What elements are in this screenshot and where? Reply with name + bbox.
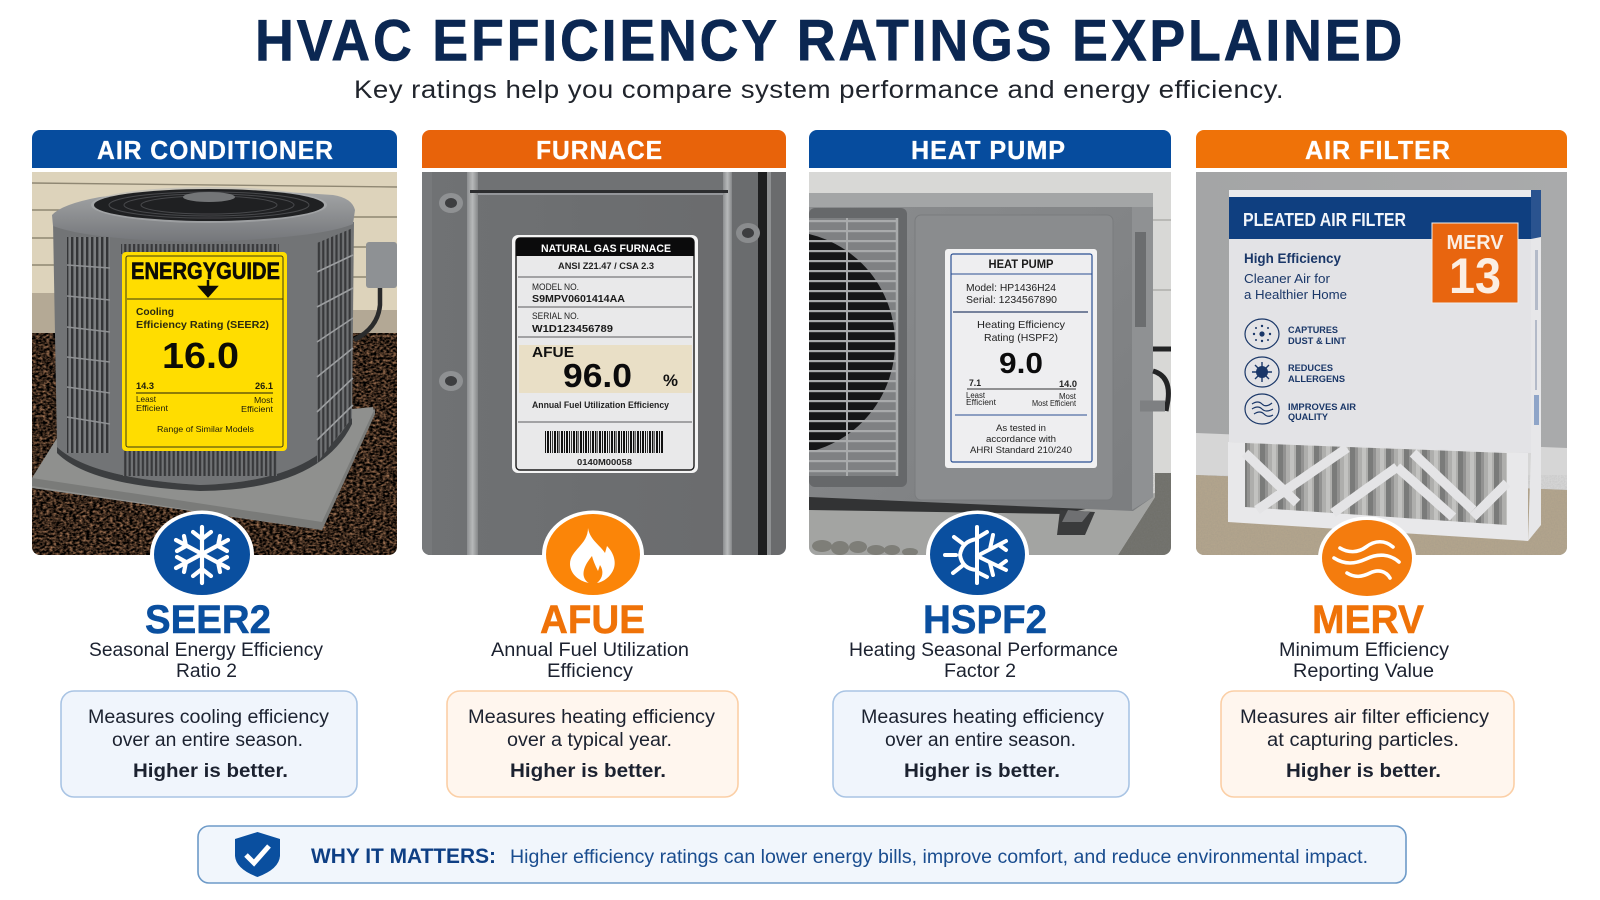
- callout: SEER2: [61, 691, 357, 797]
- label: energyguide: Efficiency Rating (SEER2): [136, 319, 269, 331]
- feature: reduces allergens: [1245, 357, 1345, 387]
- condenser body: [53, 222, 354, 485]
- rating plate: 96.0: [563, 357, 632, 394]
- rating description: MERV: [1279, 640, 1450, 682]
- label: energyguide: [122, 252, 287, 451]
- why it matters text: Higher efficiency ratings can lower energy bills, improve comfort, and reduce environmental impact.: [510, 847, 1368, 868]
- panel: air conditioner: [32, 130, 397, 797]
- heat pump label: Most: [1059, 392, 1077, 401]
- icon: sun and snowflake: [926, 510, 1029, 598]
- subtitle: Key ratings help you compare system performance and energy efficiency.: [354, 76, 1284, 104]
- unit: [809, 193, 1153, 511]
- feature: captures dust: CAPTURES: [1288, 325, 1338, 335]
- label: energyguide: Efficient: [136, 403, 169, 413]
- rating description: AFUE: Efficiency: [547, 661, 634, 682]
- feature: captures dust: [1245, 319, 1347, 349]
- screws: [439, 193, 760, 391]
- rating plate: SERIAL NO.: [532, 311, 579, 321]
- rating description: SEER2: [89, 640, 324, 682]
- callout: AFUE: Measures heating efficiency: [468, 707, 716, 728]
- rating description: AFUE: Annual Fuel Utilization: [491, 640, 689, 661]
- callout: MERV: Higher is better.: [1286, 761, 1441, 782]
- rating plate: AFUE: [532, 344, 574, 361]
- panel: air filter: [1196, 130, 1567, 797]
- label: energyguide: Efficient: [241, 404, 274, 414]
- rating description: SEER2: Seasonal Energy Efficiency: [89, 640, 324, 661]
- panel: heat pump: [809, 130, 1171, 798]
- pipes: [1153, 349, 1171, 411]
- callout: MERV: at capturing particles.: [1267, 730, 1459, 751]
- icon: snowflake: [150, 510, 254, 598]
- feature: reduces allergens: REDUCES: [1288, 363, 1333, 373]
- header: furnace: [422, 130, 786, 168]
- rating description: MERV: Minimum Efficiency: [1279, 640, 1450, 661]
- photo: pleated air filter box: High Efficiency: [1244, 250, 1341, 266]
- rating name: HSPF2: HSPF2: [923, 598, 1047, 642]
- pad: [32, 407, 375, 530]
- callout: MERV: [1221, 691, 1514, 797]
- callout: why it matters: [198, 826, 1406, 883]
- rating plate: S9MPV0601414AA: [532, 293, 625, 305]
- rating name: MERV: MERV: [1312, 598, 1424, 642]
- photo: pleated air filter box: PLEATED AIR FILTER: [1243, 210, 1406, 230]
- heat pump label: Least: [966, 391, 986, 400]
- icon: shield with check: [235, 832, 280, 877]
- header: heat pump: HEAT PUMP: [911, 135, 1066, 165]
- photo: pleated air filter box: [1196, 172, 1567, 555]
- callout: AFUE: [447, 691, 738, 797]
- callout: MERV: Measures air filter efficiency: [1240, 707, 1490, 728]
- label: energyguide: Range of Similar Models: [157, 424, 254, 434]
- rating plate: %: [663, 371, 678, 390]
- heat pump label: Heating Efficiency: [977, 320, 1066, 331]
- rating description: AFUE: [491, 640, 689, 682]
- photo: pleated air filter box: Cleaner Air for: [1244, 271, 1331, 286]
- box side: [1528, 237, 1541, 541]
- feature: improves air quality: [1245, 394, 1357, 424]
- rating description: SEER2: Ratio 2: [176, 661, 237, 682]
- rating description: HSPF2: Factor 2: [944, 661, 1016, 682]
- stones: [812, 540, 918, 556]
- callout: AFUE: over a typical year.: [507, 730, 672, 751]
- MERV badge: 13: [1449, 248, 1501, 304]
- MERV badge: [1432, 223, 1518, 304]
- rating plate: W1D123456789: [532, 323, 613, 335]
- heat pump label: HEAT PUMP: [988, 259, 1054, 271]
- foot: [1057, 510, 1095, 535]
- rating description: HSPF2: [849, 640, 1118, 682]
- icon: flame: [542, 510, 644, 598]
- feature: improves air quality: QUALITY: [1288, 412, 1328, 422]
- photo: outdoor AC unit with EnergyGuide label: [32, 172, 397, 555]
- callout: SEER2: Measures cooling efficiency: [88, 707, 330, 728]
- why it matters text: WHY IT MATTERS:: [311, 845, 496, 868]
- title: HVAC EFFICIENCY RATINGS EXPLAINED: [255, 8, 1405, 74]
- callout: SEER2: Higher is better.: [133, 761, 288, 782]
- heat pump label: AHRI Standard 210/240: [970, 445, 1072, 455]
- panel: [915, 215, 1113, 500]
- rating plate: 0140M00058: [577, 457, 632, 467]
- callout: HSPF2: over an entire season.: [885, 730, 1076, 751]
- MERV badge: MERV: [1446, 232, 1504, 254]
- callout: AFUE: Higher is better.: [510, 761, 666, 782]
- rating plate: Annual Fuel Utilization Efficiency: [532, 400, 669, 410]
- heat pump label: accordance with: [986, 434, 1056, 444]
- heat pump label: 9.0: [999, 348, 1043, 380]
- rating name: AFUE: AFUE: [540, 598, 645, 642]
- label: energyguide: Least: [136, 394, 157, 404]
- callout: HSPF2: Higher is better.: [904, 761, 1060, 782]
- rating description: MERV: Reporting Value: [1293, 661, 1434, 682]
- label: energyguide: Cooling: [136, 306, 174, 318]
- photo: furnace cabinet with rating plate: [422, 172, 786, 555]
- photo: pleated air filter box: a Healthier Home: [1244, 287, 1347, 302]
- heat pump label: 7.1: [969, 378, 981, 388]
- rating description: HSPF2: Heating Seasonal Performance: [849, 640, 1118, 661]
- heat pump label: Rating (HSPF2): [984, 333, 1058, 344]
- callout: SEER2: over an entire season.: [112, 730, 303, 751]
- rating plate: MODEL NO.: [532, 282, 579, 292]
- feature: reduces allergens: ALLERGENS: [1288, 374, 1345, 384]
- heat pump label: Efficient: [966, 398, 997, 407]
- callout: HSPF2: [833, 691, 1129, 797]
- callout: HSPF2: Measures heating efficiency: [861, 707, 1105, 728]
- gravel right: [1118, 473, 1171, 555]
- fan: [91, 187, 327, 223]
- photo: heat pump unit with label: [809, 172, 1171, 555]
- fan guard: [809, 208, 907, 487]
- box front: [1229, 190, 1531, 197]
- rating plate: NATURAL GAS FURNACE: [541, 243, 671, 255]
- header: air conditioner: [32, 130, 397, 168]
- header: air filter: AIR FILTER: [1305, 135, 1451, 165]
- feature: captures dust: DUST & LINT: [1288, 336, 1347, 346]
- pad: [809, 493, 1155, 555]
- filter frame: [1228, 442, 1528, 541]
- rating name: SEER2: SEER2: [145, 598, 271, 642]
- rating plate: ANSI Z21.47 / CSA 2.3: [558, 261, 654, 272]
- label: energyguide: 16.0: [162, 335, 239, 376]
- heat pump label: As tested in: [996, 423, 1046, 433]
- feature: improves air quality: IMPROVES AIR: [1288, 402, 1357, 412]
- label: energyguide: 14.3: [136, 381, 154, 392]
- label: energyguide: Most: [254, 395, 274, 405]
- heat pump label: 14.0: [1059, 379, 1077, 389]
- heat pump label: [945, 249, 1097, 468]
- header: air conditioner: AIR CONDITIONER: [97, 135, 334, 165]
- heat pump label: Model: HP1436H24: [966, 283, 1056, 294]
- label: energyguide: ENERGYGUIDE: [131, 258, 280, 285]
- disconnect box: [366, 242, 397, 288]
- header: furnace: FURNACE: [536, 135, 663, 165]
- icon: air waves: [1318, 516, 1416, 600]
- header: air filter: [1196, 130, 1567, 168]
- rating plate: [512, 235, 698, 473]
- shadow under unit: [809, 497, 1086, 514]
- panel: furnace: [422, 130, 786, 797]
- header: heat pump: [809, 130, 1171, 168]
- heat pump label: Most Efficient: [1032, 399, 1077, 408]
- heat pump label: Serial: 1234567890: [966, 295, 1057, 306]
- label: energyguide: 26.1: [255, 381, 274, 392]
